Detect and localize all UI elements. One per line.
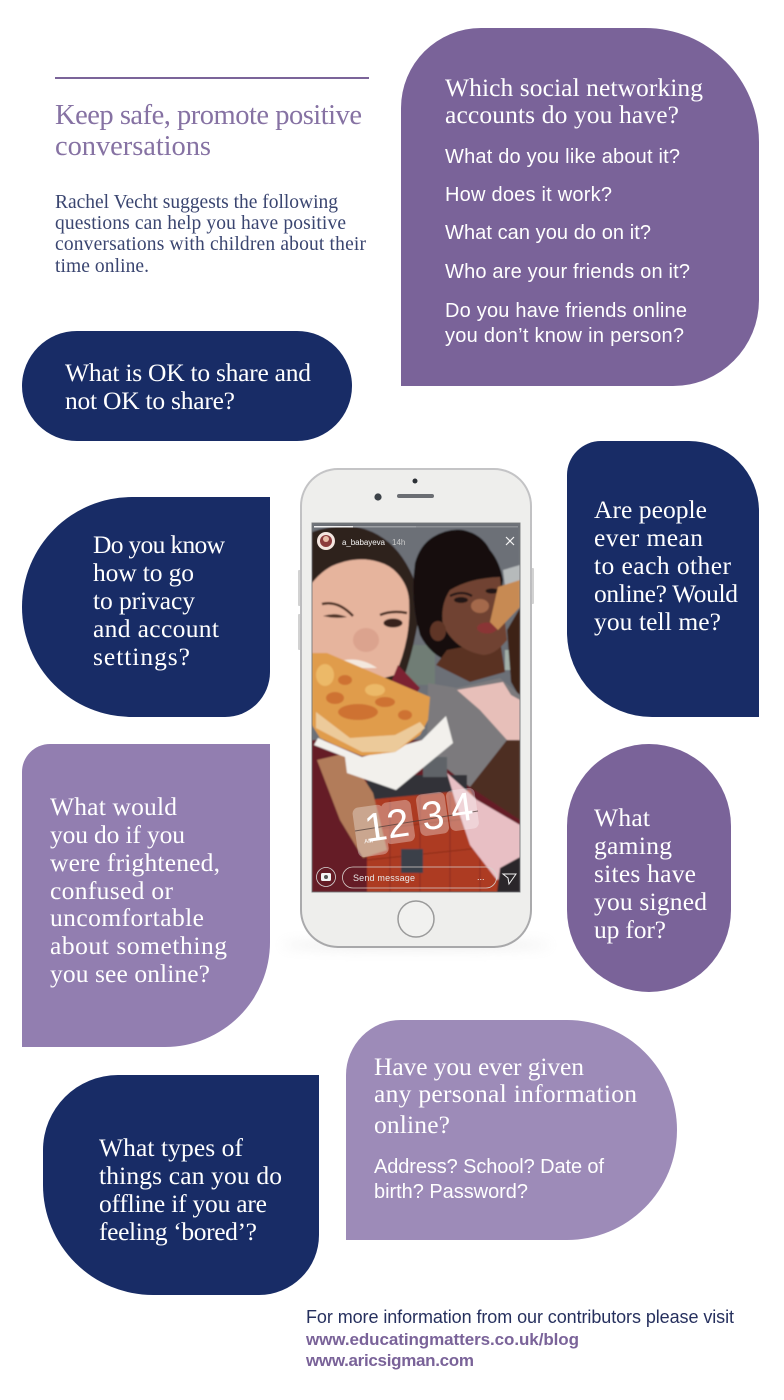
story progress bar bbox=[353, 526, 416, 528]
title: conversations bbox=[55, 131, 211, 162]
bubble: frightened or confused: uncomfortable bbox=[50, 903, 204, 932]
right girl neck and face bbox=[436, 646, 506, 682]
right girl hair bbox=[413, 530, 503, 662]
flip clock sticker: AM bbox=[364, 838, 374, 846]
pink top centre bbox=[457, 682, 520, 740]
message field bbox=[342, 867, 496, 888]
flip clock sticker: 1 bbox=[362, 804, 390, 851]
bubble: gaming sites: gaming bbox=[594, 831, 672, 860]
bubble: offline when bored: offline if you are bbox=[99, 1189, 267, 1218]
bubble: offline when bored: things can you do bbox=[99, 1161, 282, 1190]
intro text: Rachel Vecht suggests the following bbox=[55, 192, 338, 213]
bubble: social networking accounts: Who are your friends on it? bbox=[445, 261, 690, 283]
camera button bbox=[316, 868, 336, 886]
title: Keep safe, promote positive bbox=[55, 100, 362, 131]
bubble: gaming sites bbox=[567, 744, 731, 992]
flip clock sticker: 2 bbox=[384, 801, 412, 847]
bubble: privacy settings: settings? bbox=[93, 642, 190, 671]
bubble: privacy settings: to privacy bbox=[93, 586, 195, 615]
flip clock sticker bbox=[352, 785, 480, 858]
left girl arm bbox=[317, 753, 387, 858]
bubble: frightened or confused: were frightened, bbox=[50, 848, 220, 877]
bubble: frightened or confused: you do if you bbox=[50, 820, 185, 849]
close icon bbox=[506, 537, 514, 545]
footer links: For more information from our contributors please visit bbox=[306, 1307, 734, 1327]
right arm bbox=[507, 608, 520, 698]
message field: Send message bbox=[353, 873, 415, 883]
bubble: privacy settings bbox=[22, 497, 270, 717]
message field: ... bbox=[477, 872, 485, 882]
bubble: personal information: any personal information bbox=[374, 1079, 637, 1108]
intro text bbox=[55, 192, 366, 277]
bubble: social networking accounts: What do you like about it? bbox=[445, 146, 680, 168]
napkin bbox=[314, 716, 453, 790]
left girl hair bbox=[312, 526, 419, 690]
bubble: privacy settings: how to go bbox=[93, 558, 194, 587]
intro text: time online. bbox=[55, 256, 149, 277]
time: 14h bbox=[392, 538, 405, 547]
bubble: gaming sites: you signed bbox=[594, 887, 707, 916]
left pizza bbox=[312, 653, 430, 756]
bubble: gaming sites: up for? bbox=[594, 915, 666, 944]
bubble: offline when bored: feeling ‘bored’? bbox=[99, 1217, 257, 1246]
intro text: conversations with children about their bbox=[55, 234, 366, 255]
bubble: privacy settings: and account bbox=[93, 614, 219, 643]
bubble: frightened or confused: about something bbox=[50, 931, 227, 960]
bubble: personal information bbox=[346, 1020, 677, 1240]
left girl face bbox=[312, 559, 409, 690]
intro text: questions can help you have positive bbox=[55, 213, 346, 234]
brown arm right bbox=[470, 740, 520, 820]
bubble: gaming sites: sites have bbox=[594, 859, 696, 888]
phone with story photo bbox=[298, 468, 534, 950]
send icon bbox=[503, 874, 516, 884]
bubble: privacy settings: Do you know bbox=[93, 530, 226, 559]
header block: rule, title and intro bbox=[55, 77, 369, 277]
bubble: people being mean: Are people bbox=[594, 495, 707, 524]
bubble: people being mean: ever mean bbox=[594, 523, 703, 552]
bubble: personal information: Have you ever given bbox=[374, 1052, 584, 1081]
background wall light patch bbox=[503, 565, 520, 586]
flip clock sticker: 3 bbox=[419, 793, 447, 839]
bubble: people being mean: online? Would bbox=[594, 579, 738, 608]
footer links: www.aricsigman.com bbox=[305, 1351, 474, 1370]
bubble: frightened or confused: confused or bbox=[50, 876, 174, 905]
dark red top collar bbox=[392, 664, 420, 692]
story photo bbox=[312, 523, 520, 892]
bubble: social networking accounts: you don’t know in person? bbox=[445, 325, 684, 347]
bubble: people being mean bbox=[567, 441, 759, 717]
bubble: social networking accounts: Which social networking bbox=[445, 73, 703, 102]
footer links bbox=[305, 1307, 734, 1370]
bubble: people being mean: to each other bbox=[594, 551, 732, 580]
bubble: offline when bored bbox=[43, 1075, 319, 1295]
bubble: social networking accounts: What can you do on it? bbox=[445, 222, 651, 244]
title bbox=[55, 100, 362, 162]
bubble: frightened or confused: What would bbox=[50, 792, 177, 821]
username: a_babayeva bbox=[342, 538, 386, 547]
bubble: people being mean: you tell me? bbox=[594, 607, 721, 636]
bubble: personal information: online? bbox=[374, 1110, 450, 1139]
footer links: www.educatingmatters.co.uk/blog bbox=[305, 1330, 579, 1349]
bubble: personal information: birth? Password? bbox=[374, 1181, 528, 1203]
bubble: personal information: Address? School? Date of bbox=[374, 1156, 604, 1178]
avatar bbox=[317, 532, 335, 550]
bubble: frightened or confused: you see online? bbox=[50, 959, 210, 988]
bubble: offline when bored: What types of bbox=[99, 1133, 244, 1162]
bubble: social networking accounts: accounts do you have? bbox=[445, 100, 679, 129]
bubble: OK to share: What is OK to share and bbox=[65, 358, 311, 387]
bubble: OK to share: not OK to share? bbox=[65, 386, 235, 415]
flip clock sticker: 4 bbox=[448, 785, 476, 831]
grey top bbox=[427, 678, 520, 787]
window and dark floor bbox=[367, 775, 467, 800]
right pizza bbox=[490, 580, 520, 630]
pink shirt lower bbox=[447, 773, 520, 880]
bubble: social networking accounts: How does it work? bbox=[445, 184, 612, 206]
bubble: social networking accounts: Do you have friends online bbox=[445, 300, 687, 322]
bubble: OK to share bbox=[22, 331, 352, 441]
bubble: gaming sites: What bbox=[594, 803, 650, 832]
bubble: frightened or confused bbox=[22, 744, 270, 1047]
bubble: social networking accounts bbox=[401, 28, 759, 386]
